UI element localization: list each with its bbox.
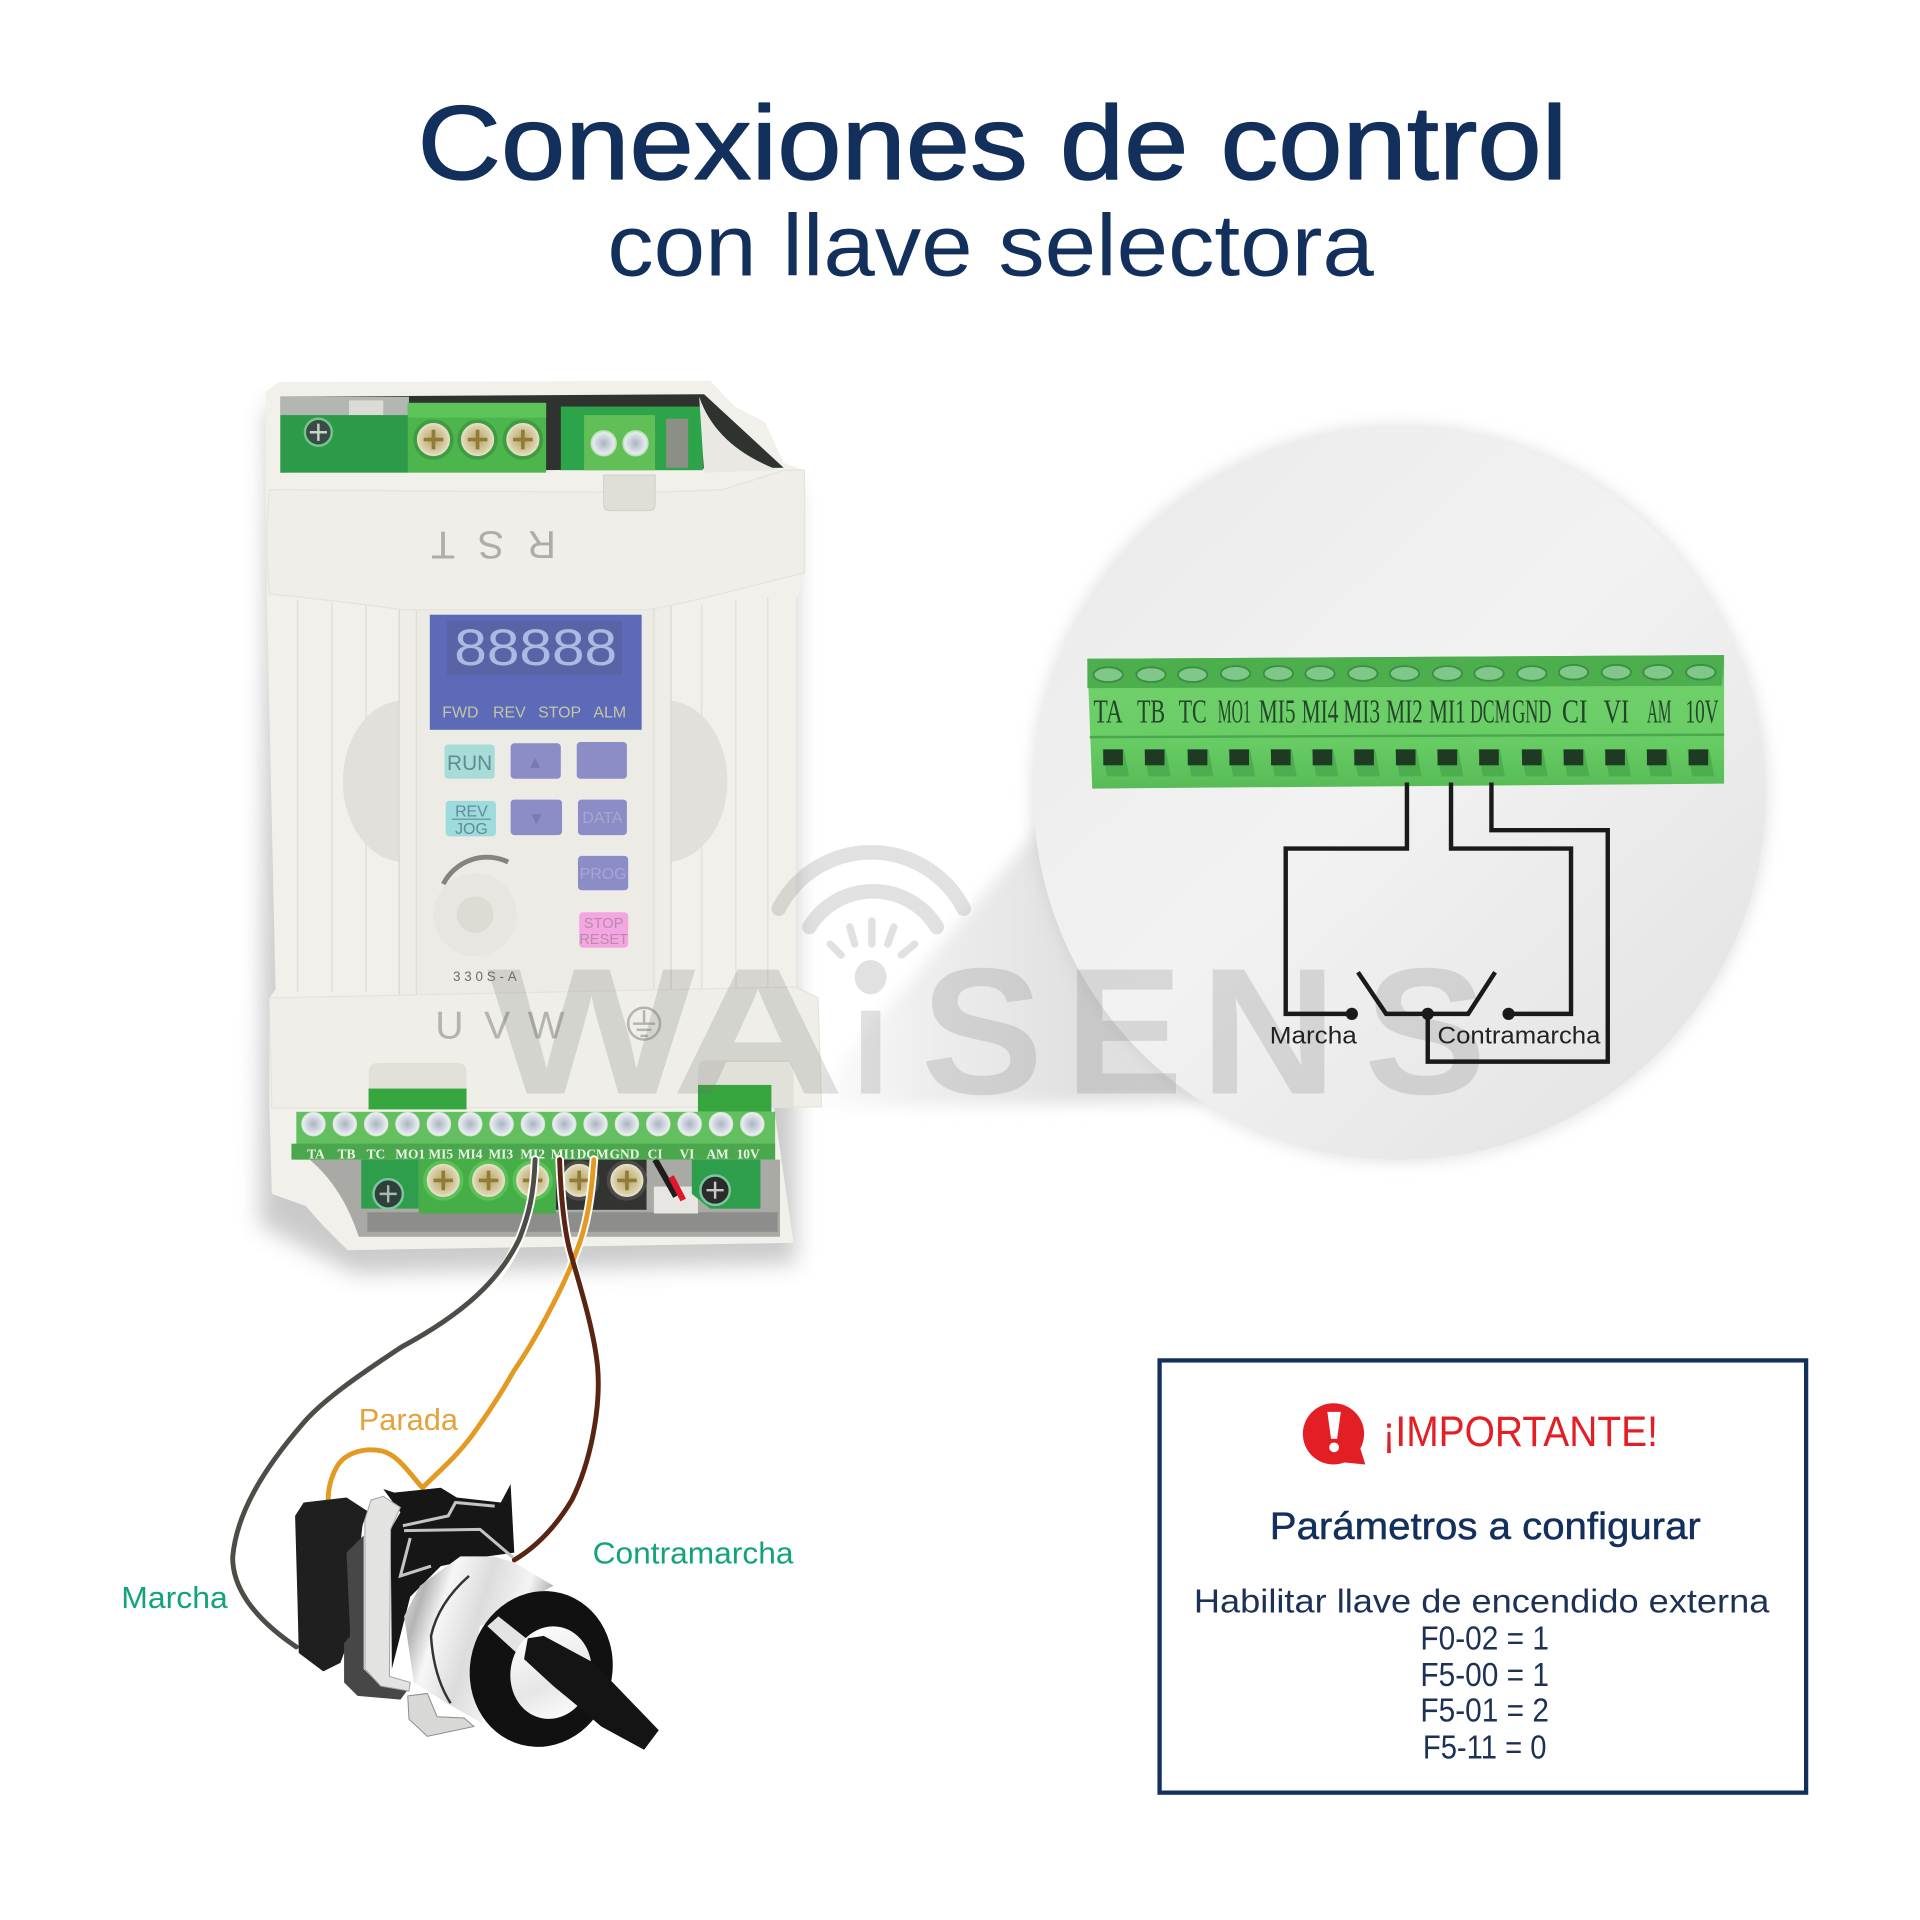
terminal screws bbox=[415, 421, 541, 458]
strip labels: MI5 bbox=[428, 1146, 453, 1161]
gold screws bbox=[425, 1162, 551, 1199]
window background bbox=[280, 394, 784, 473]
earth symbol bbox=[628, 1008, 660, 1040]
terminal labels: MI5 bbox=[1259, 692, 1296, 730]
parameter text: Habilitar llave de encendido externa bbox=[1194, 1584, 1770, 1621]
terminal labels: TC bbox=[1179, 692, 1207, 730]
dark screws bbox=[561, 1162, 645, 1199]
callout disc shadow bbox=[1031, 425, 1768, 1162]
terminal labels: MI2 bbox=[1386, 692, 1423, 730]
strip labels: MI2 bbox=[520, 1146, 545, 1161]
watermark dot bbox=[855, 960, 887, 994]
terminal labels: GND bbox=[1512, 692, 1551, 730]
selector handle bbox=[524, 1636, 659, 1750]
device shadow bbox=[260, 404, 796, 1273]
keypad bbox=[433, 742, 628, 984]
watermark wifi outer arc bbox=[779, 852, 964, 909]
pcb screw bbox=[373, 1179, 403, 1209]
watermark word: A bbox=[671, 931, 845, 1132]
digit window bbox=[447, 621, 622, 675]
strip labels: GND bbox=[610, 1146, 640, 1161]
UVW labels: V bbox=[484, 1004, 510, 1047]
top window bbox=[280, 394, 784, 473]
shift key bbox=[577, 742, 627, 779]
model text: 330S-A bbox=[453, 969, 517, 984]
Contramarcha circuit line bbox=[1451, 782, 1571, 1014]
up key bbox=[511, 743, 561, 779]
parameter text: F5-11 = 0 bbox=[1423, 1729, 1547, 1766]
pcb right bbox=[561, 407, 703, 470]
watermark word: W bbox=[487, 931, 696, 1132]
status labels bbox=[442, 705, 626, 722]
watermark wifi inner arc bbox=[809, 891, 937, 927]
top screws bbox=[1093, 665, 1716, 682]
parameter text bbox=[1194, 1584, 1770, 1766]
screw slots bbox=[433, 1171, 637, 1190]
enter key: DATA bbox=[582, 810, 623, 827]
strip labels: MI3 bbox=[488, 1146, 513, 1161]
LCD background bbox=[430, 615, 642, 730]
control terminal strip bbox=[291, 1112, 775, 1161]
panel inner bbox=[416, 600, 654, 998]
halo brown bbox=[560, 1160, 587, 1319]
terminal labels: TB bbox=[1137, 692, 1165, 730]
device body bbox=[266, 381, 822, 1250]
lower window bbox=[310, 1160, 780, 1237]
watermark bbox=[487, 852, 1487, 1132]
strip labels: TC bbox=[367, 1146, 385, 1161]
window background bbox=[310, 1160, 780, 1237]
dark slats bbox=[367, 1212, 778, 1232]
strip labels: VI bbox=[679, 1146, 694, 1161]
selector switch bbox=[295, 1484, 659, 1763]
strip labels: CI bbox=[648, 1146, 663, 1161]
UVW labels: U bbox=[435, 1004, 464, 1047]
terminal labels: DCM bbox=[1470, 692, 1510, 730]
orange Parada wire bbox=[328, 1160, 594, 1500]
watermark rays bbox=[830, 921, 915, 955]
down key: ▼ bbox=[528, 808, 545, 828]
terminal labels: MO1 bbox=[1218, 692, 1251, 730]
device: frequency drive bbox=[260, 381, 822, 1273]
enter key bbox=[578, 800, 627, 835]
wire labels bbox=[121, 1403, 794, 1615]
bezel seam bbox=[431, 1576, 469, 1703]
pcb left bbox=[280, 415, 409, 473]
green terminal bbox=[408, 403, 546, 473]
important heading: ¡IMPORTANTE! bbox=[1382, 1408, 1658, 1456]
up key: ▲ bbox=[527, 752, 544, 772]
strip body bbox=[296, 1112, 775, 1160]
keypad panel bbox=[399, 600, 671, 998]
terminal labels: MI3 bbox=[1343, 692, 1380, 730]
callout cone bbox=[802, 818, 1206, 1108]
terminal labels: MI4 bbox=[1302, 692, 1338, 730]
strip labels: 10V bbox=[737, 1146, 760, 1161]
strip labels: TA bbox=[307, 1146, 325, 1161]
black ring bbox=[452, 1575, 630, 1763]
strip labels: AM bbox=[706, 1146, 729, 1161]
title bbox=[418, 85, 1567, 295]
ring opening bbox=[502, 1619, 600, 1727]
magnifier callout: zoom on control terminal bbox=[802, 425, 1768, 1162]
parameter text: F5-00 = 1 bbox=[1420, 1657, 1549, 1694]
watermark word: E bbox=[1065, 931, 1183, 1132]
prog key: PROG bbox=[580, 866, 626, 883]
brown Contramarcha wire bbox=[514, 1160, 598, 1560]
prog key bbox=[578, 856, 628, 890]
strip labels: MI1 bbox=[551, 1146, 576, 1161]
hole recesses bbox=[1102, 749, 1714, 776]
watermark word: N bbox=[1200, 931, 1337, 1132]
terminal labels bbox=[1093, 692, 1719, 730]
small terminal bbox=[584, 415, 655, 470]
ring marker bbox=[487, 1616, 528, 1653]
digits: 88888 bbox=[454, 618, 617, 676]
black curve bbox=[699, 397, 779, 473]
black Marcha wire bbox=[233, 1160, 535, 1647]
watermark word: S bbox=[921, 931, 1043, 1132]
terminal labels: CI bbox=[1562, 692, 1588, 730]
panel border bbox=[1160, 1360, 1806, 1793]
UVW labels bbox=[435, 1004, 565, 1047]
zoomed terminal block bbox=[1087, 655, 1724, 789]
Parada label: Parada bbox=[359, 1403, 459, 1437]
black lead bbox=[655, 1160, 676, 1196]
orange halo bbox=[550, 1160, 594, 1319]
watermark word: ı bbox=[851, 952, 890, 1127]
callout disc bbox=[1033, 427, 1766, 1160]
status labels: REV bbox=[493, 705, 526, 722]
LCD display bbox=[430, 615, 642, 730]
common circuit line bbox=[1428, 782, 1608, 1062]
body ribs bbox=[298, 598, 768, 992]
wire holes bbox=[1103, 749, 1708, 765]
cover notch bbox=[604, 475, 655, 511]
pcb screw bbox=[305, 419, 332, 446]
stop key: RESET bbox=[579, 932, 628, 948]
Marcha circuit label: Marcha bbox=[1270, 1022, 1357, 1049]
Marcha label: Marcha bbox=[121, 1581, 229, 1615]
lower bracket bbox=[408, 1693, 474, 1736]
title line 1: Conexiones de control bbox=[418, 85, 1567, 202]
green terminal bbox=[419, 1160, 556, 1213]
white connector bbox=[654, 1187, 698, 1213]
white tab bbox=[349, 400, 383, 415]
pcb right bbox=[692, 1160, 760, 1209]
silver bar bbox=[280, 397, 409, 416]
RUN key: RUN bbox=[447, 752, 492, 775]
divider line bbox=[1090, 735, 1724, 737]
potentiometer knob bbox=[433, 857, 517, 956]
block body bbox=[1087, 655, 1724, 789]
left notch terminal bbox=[369, 1089, 467, 1109]
screw slots bbox=[424, 430, 533, 449]
REV JOG key: REV bbox=[455, 804, 488, 821]
RST label: R S T bbox=[431, 522, 556, 565]
top cover: RST bbox=[267, 470, 804, 610]
watermark word bbox=[487, 931, 1487, 1132]
right notch bbox=[698, 1060, 793, 1108]
strip labels: MI4 bbox=[458, 1146, 483, 1161]
rear contact block bbox=[295, 1498, 367, 1671]
side plate bbox=[344, 1536, 408, 1700]
stop key: STOP bbox=[584, 916, 624, 932]
contact hardware bbox=[400, 1502, 513, 1576]
Marcha circuit line bbox=[1286, 782, 1407, 1014]
side recess left bbox=[343, 700, 465, 862]
Contramarcha label: Contramarcha bbox=[593, 1537, 794, 1571]
strip labels bbox=[307, 1146, 760, 1161]
jumper bbox=[666, 419, 688, 468]
wire halos at device bbox=[451, 1160, 535, 1319]
status labels: FWD bbox=[442, 705, 479, 722]
strip screws bbox=[302, 1112, 764, 1136]
watermark word: S bbox=[1364, 931, 1487, 1132]
terminal labels: 10V bbox=[1686, 692, 1719, 730]
down key bbox=[511, 800, 562, 835]
status labels: ALM bbox=[593, 705, 626, 722]
right screw bbox=[700, 1176, 730, 1205]
terminal labels: TA bbox=[1093, 692, 1123, 730]
red lead bbox=[671, 1177, 683, 1200]
REV JOG key: JOG bbox=[455, 821, 488, 838]
terminal labels: VI bbox=[1603, 692, 1629, 730]
selector contacts bbox=[1358, 972, 1495, 1014]
strip labels: TB bbox=[338, 1146, 356, 1161]
Contramarcha circuit label: Contramarcha bbox=[1438, 1022, 1601, 1049]
side recess right bbox=[605, 700, 727, 862]
block top band bbox=[1087, 655, 1724, 688]
icon: warning speech bubble bbox=[1303, 1403, 1365, 1464]
parameter text: F5-01 = 2 bbox=[1420, 1693, 1549, 1730]
strip labels: DCM bbox=[577, 1146, 609, 1161]
strip labels: MO1 bbox=[395, 1146, 425, 1161]
small screws bbox=[591, 431, 648, 456]
wiring from terminals to selector bbox=[233, 1160, 598, 1647]
metal bezel bbox=[404, 1556, 553, 1724]
silver bracket bbox=[365, 1496, 410, 1691]
title line 2: con llave selectora bbox=[607, 198, 1375, 295]
parameter text: F0-02 = 1 bbox=[1420, 1620, 1549, 1657]
right notch terminal bbox=[698, 1085, 771, 1112]
UVW labels: W bbox=[528, 1004, 565, 1047]
lower cover: UVW bbox=[269, 987, 822, 1112]
strip shadow band bbox=[291, 1144, 775, 1160]
status labels: STOP bbox=[538, 705, 581, 722]
terminal labels: AM bbox=[1647, 692, 1671, 730]
left notch bbox=[369, 1063, 467, 1108]
parameters heading: Parámetros a configurar bbox=[1270, 1506, 1701, 1548]
control circuit diagram bbox=[1270, 782, 1608, 1062]
stop key bbox=[579, 912, 628, 948]
pcb left bbox=[361, 1160, 419, 1209]
cover shape bbox=[267, 470, 804, 610]
REV JOG key bbox=[446, 801, 496, 838]
cover shape bbox=[269, 987, 822, 1108]
front contact block bbox=[383, 1484, 514, 1669]
dark terminal bbox=[556, 1160, 647, 1210]
terminal labels: MI1 bbox=[1429, 692, 1466, 730]
contact dots bbox=[1346, 1008, 1515, 1020]
green terminal shade bbox=[408, 403, 546, 418]
panel: important parameters bbox=[1160, 1360, 1806, 1793]
RUN key bbox=[444, 744, 495, 779]
